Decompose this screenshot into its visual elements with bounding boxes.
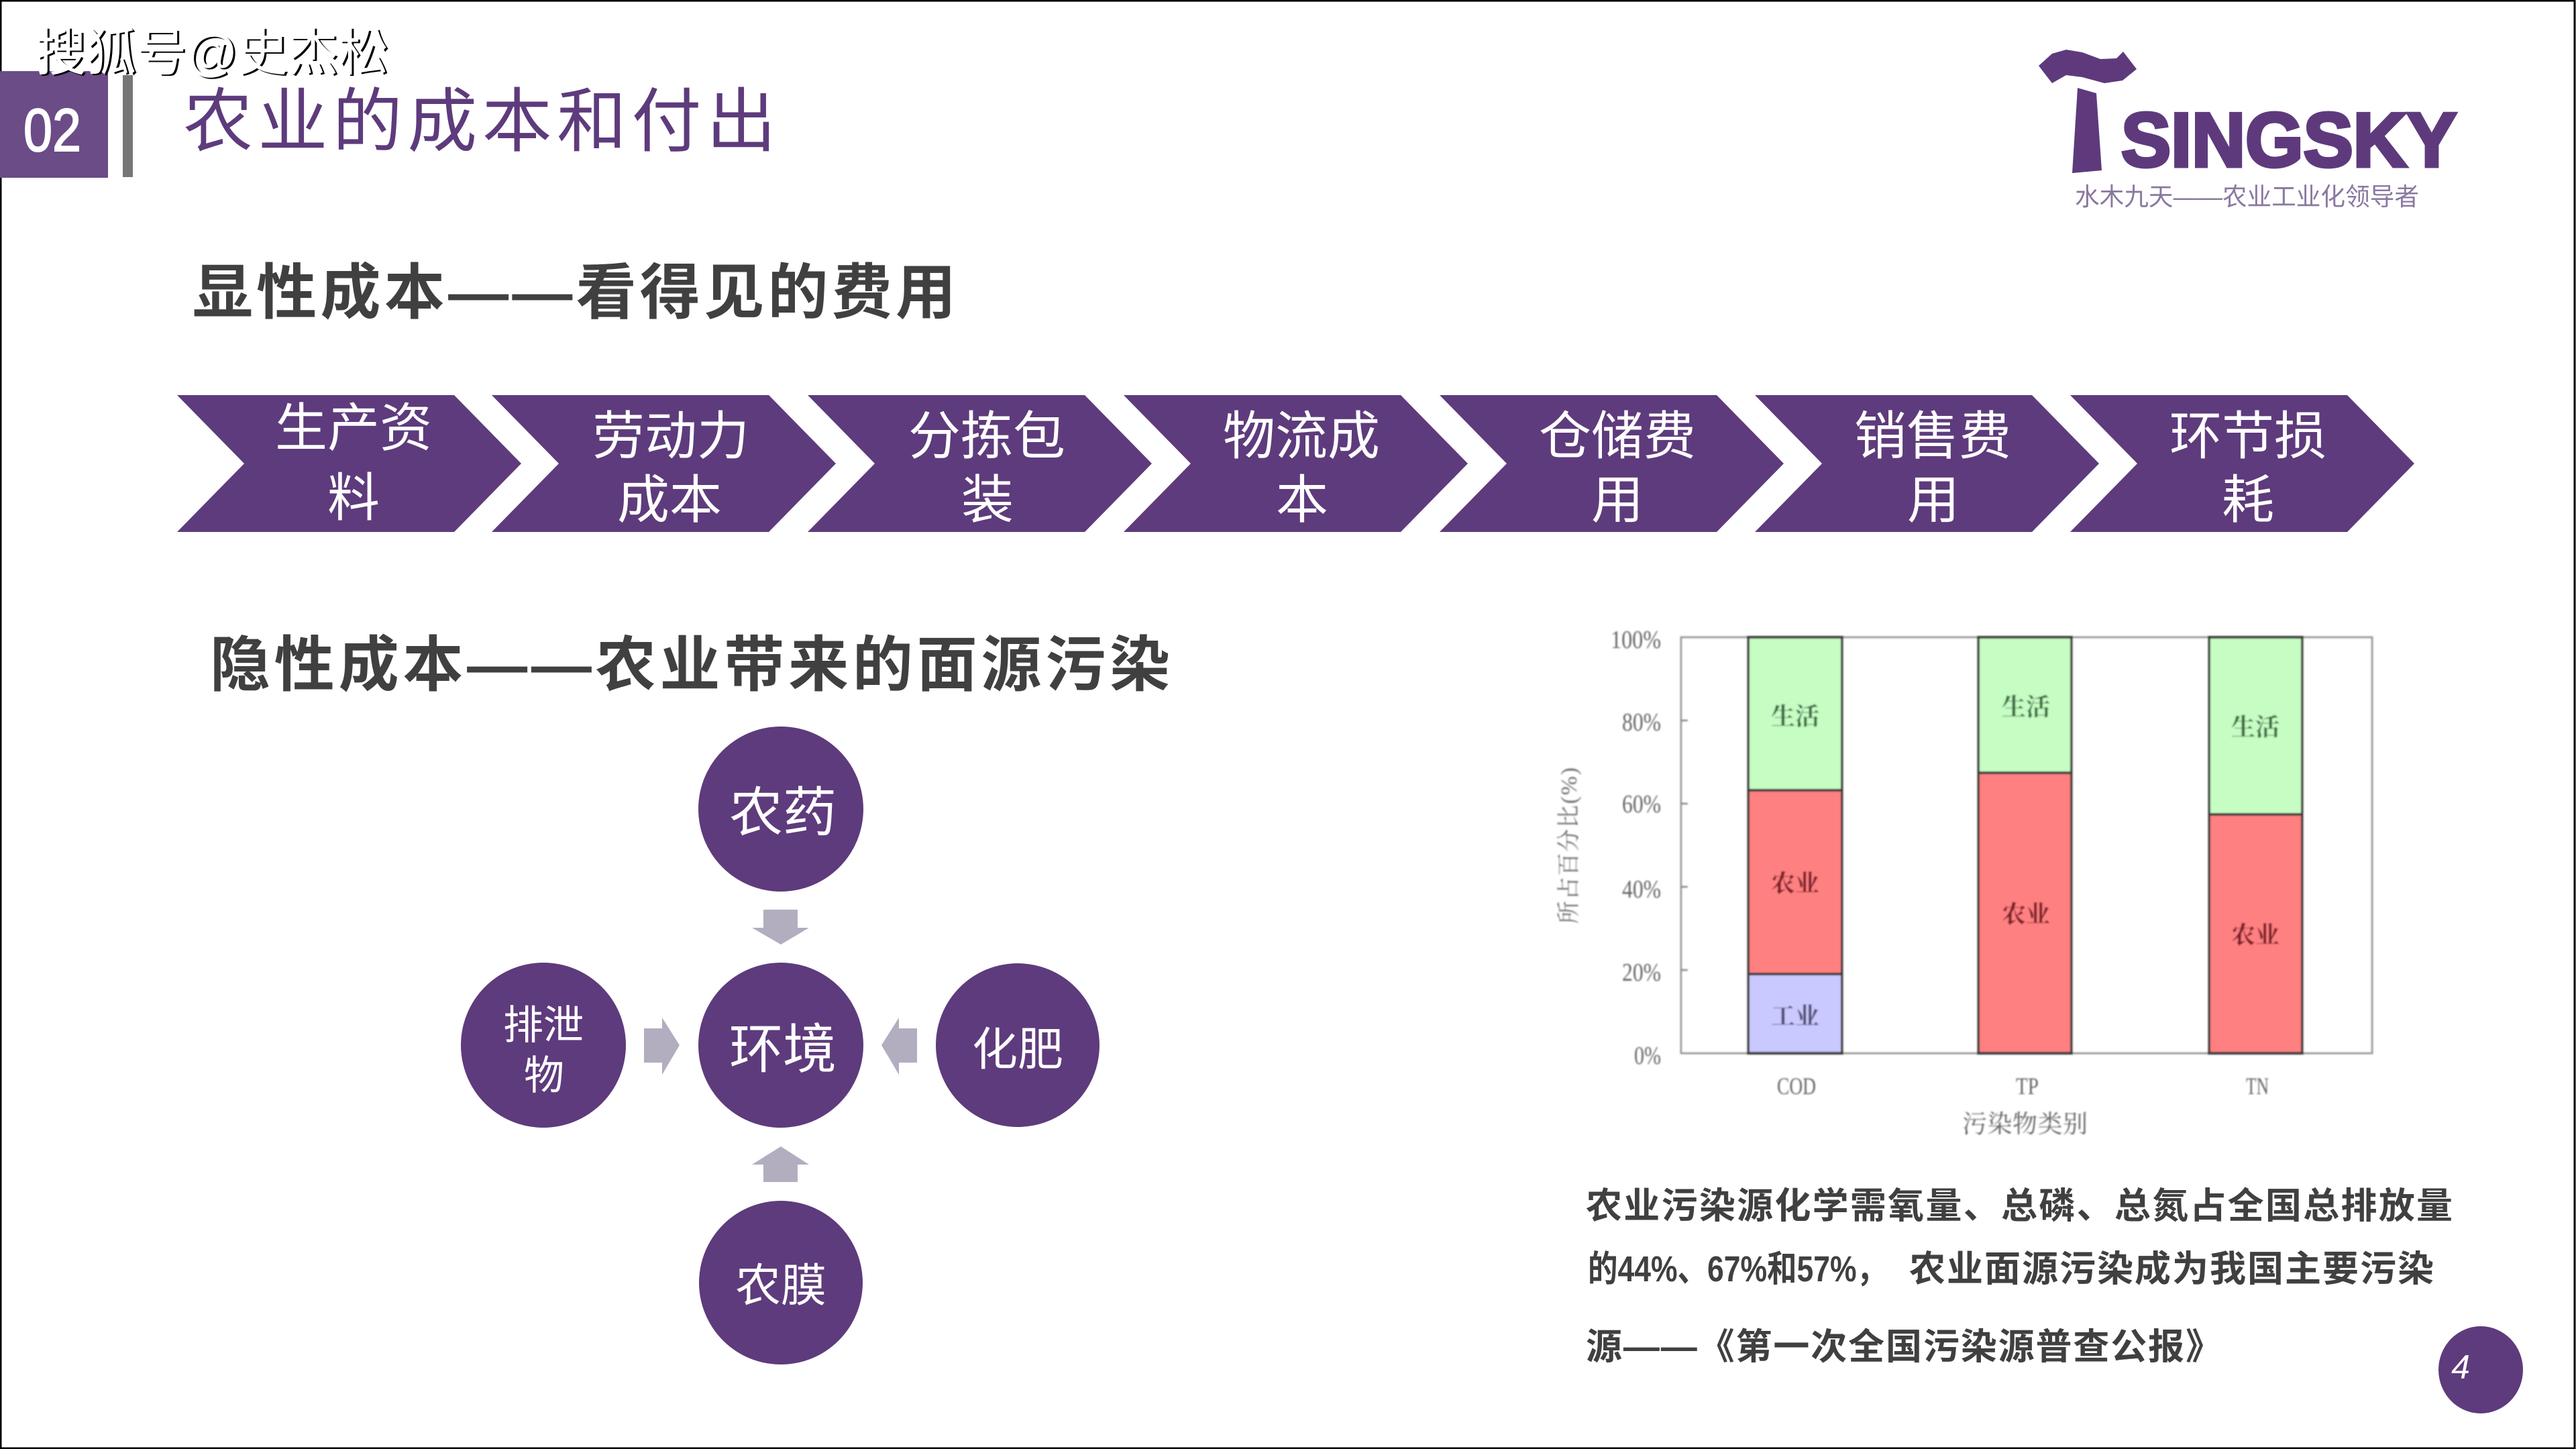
chevron: storage cost: 用 [1591,470,1644,529]
page number [2438,1326,2523,1413]
plot frame [1681,637,2372,1053]
bar labels: 农业 [2001,901,2050,928]
chevron: labor cost [492,395,836,532]
chevron: labor cost: 劳动力 [592,407,749,466]
chevron: link losses: 环节损 [2169,407,2326,466]
logo: Tsingsky: 水木九天——农业工业化领导者 [2075,183,2419,211]
bar labels: 工业 [1771,1003,1819,1030]
chevron: link losses [2070,395,2414,532]
x axis labels: TN [2246,1073,2269,1099]
chevron process: explicit cost items [177,395,2414,532]
source paragraph: 源——《第一次全国污染源普查公报》 [1586,1327,2222,1367]
bar: COD [1748,637,1842,1053]
watermark: 搜狐号@史杰松 [36,25,388,82]
source paragraph: 的44%、67%和57%， [1588,1249,1886,1289]
chevron: link losses: 耗 [2222,470,2274,529]
chevron: sorting and packaging [808,395,1152,532]
watermark: 搜狐号@史杰松 [38,26,390,83]
circle: pesticide [698,727,863,892]
bar labels: 生活 [1771,703,1819,730]
circle: agricultural film: 农膜 [735,1260,826,1311]
x axis title: 污染物类别 [1962,1110,2088,1138]
chevron: sales cost: 销售费 [1854,407,2011,466]
circle: fertilizer [936,963,1099,1127]
logo: Tsingsky [2039,50,2457,211]
chevron: sorting and packaging: 装 [961,470,1014,529]
circle: pesticide: 农药 [729,783,837,843]
bar: TN [2209,637,2302,1053]
arrow: down [752,910,809,945]
chevron: logistics cost: 本 [1276,470,1328,529]
stacked bar chart: pollution share by source [1556,626,2372,1138]
y axis labels: 0% [1634,1042,1661,1070]
bar labels: 生活 [2002,694,2050,720]
arrow: left [881,1018,917,1075]
chevron: sales cost: 用 [1907,470,1960,529]
page number: 4 [2451,1348,2470,1386]
chevron: logistics cost [1124,395,1468,532]
bar labels [1770,694,2279,1030]
source paragraph [1586,1186,2453,1367]
y axis labels [1611,626,1661,1070]
y axis labels: 60% [1622,790,1661,818]
section number badge [0,71,133,178]
x axis labels [1777,1073,2269,1099]
y axis labels: 80% [1622,708,1661,737]
section number badge: 02 [23,97,81,164]
diagram: pollution sources to environment [461,727,1099,1364]
arrow: right [644,1018,680,1075]
chevron: production materials [177,395,521,532]
circle: fertilizer: 化肥 [972,1024,1063,1075]
y axis labels: 20% [1622,959,1661,987]
bar labels: 生活 [2231,714,2279,741]
title: 农业的成本和付出 [183,83,776,161]
y axis title: 所占百分比(%) [1556,767,1582,924]
chevron: storage cost: 仓储费 [1539,407,1696,466]
y axis labels: 40% [1622,875,1661,904]
arrow: up [752,1146,809,1182]
circle: excrement: 排泄 [503,1003,584,1048]
source paragraph: 农业面源污染成为我国主要污染 [1909,1249,2434,1289]
chevron: sales cost [1755,395,2099,532]
x axis labels: TP [2016,1073,2039,1099]
chevron: production materials: 生产资 [275,398,432,458]
y axis labels: 100% [1611,626,1661,654]
bar labels: 农业 [1770,870,1819,897]
heading: explicit costs: 显性成本——看得见的费用 [193,260,956,327]
logo: Tsingsky: SINGSKY [2121,98,2457,183]
circle: excrement [461,963,626,1128]
circle: excrement: 物 [524,1053,564,1098]
heading: hidden costs: 隐性成本——农业带来的面源污染 [210,632,1170,699]
x axis labels: COD [1777,1073,1816,1099]
circle: agricultural film [699,1201,863,1364]
chevron: labor cost: 成本 [617,470,722,529]
circle: environment: 环境 [729,1020,837,1079]
source paragraph: 农业污染源化学需氧量、总磷、总氮占全国总排放量 [1586,1186,2453,1226]
bar labels: 农业 [2231,922,2279,949]
chevron: storage cost [1440,395,1784,532]
bar: TP [1978,637,2072,1053]
circle: environment [698,963,863,1128]
chevron: production materials: 料 [327,468,380,527]
chevron: logistics cost: 物流成 [1223,407,1380,466]
chevron: sorting and packaging: 分拣包 [908,407,1065,466]
